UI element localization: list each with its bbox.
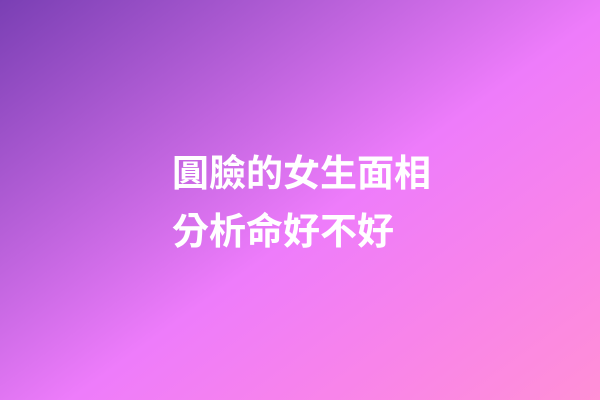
title xyxy=(172,153,431,252)
title: 分析命好不好 xyxy=(172,211,394,252)
title: 圓臉的女生面相 xyxy=(172,153,431,194)
